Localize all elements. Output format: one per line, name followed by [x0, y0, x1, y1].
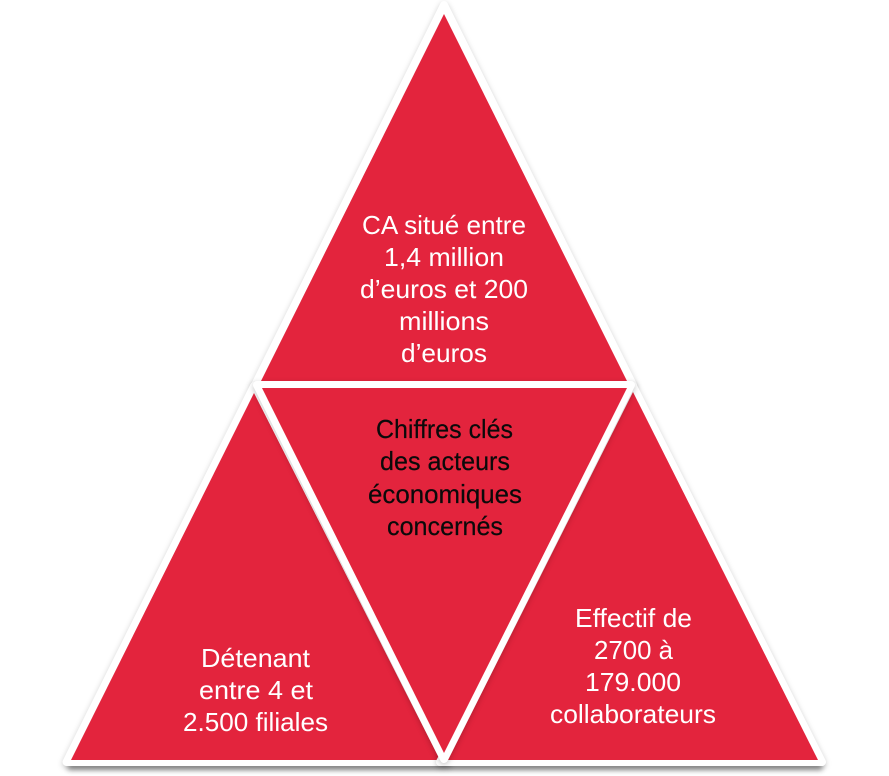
text: workforce: Effectif de [575, 603, 692, 633]
panel: top triangle [255, 5, 633, 385]
panel: centre inverted triangle [257, 385, 631, 759]
text: central heading [368, 414, 522, 541]
text: workforce [550, 603, 716, 729]
text: central heading: concernés [387, 511, 503, 541]
text: subsidiaries: Détenant [201, 643, 311, 673]
text: workforce: collaborateurs [550, 699, 716, 729]
text: turnover: millions [399, 306, 489, 336]
text: turnover: d’euros et 200 [360, 274, 528, 304]
text: central heading: économiques [368, 479, 522, 509]
text: turnover: CA situé entre [362, 210, 526, 240]
text: turnover [360, 210, 528, 368]
panel: left triangle [66, 386, 448, 762]
text: workforce: 179.000 [585, 667, 681, 697]
base shadow [68, 763, 822, 770]
text: central heading: Chiffres clés [376, 414, 513, 444]
text: turnover: d’euros [401, 338, 487, 368]
panel: right triangle [440, 386, 822, 762]
text: subsidiaries: entre 4 et [199, 675, 314, 705]
text: workforce: 2700 à [594, 635, 674, 665]
text: subsidiaries: 2.500 filiales [183, 707, 328, 737]
text: subsidiaries [183, 643, 328, 737]
text: turnover: 1,4 million [384, 242, 504, 272]
text: central heading: des acteurs [380, 446, 510, 476]
